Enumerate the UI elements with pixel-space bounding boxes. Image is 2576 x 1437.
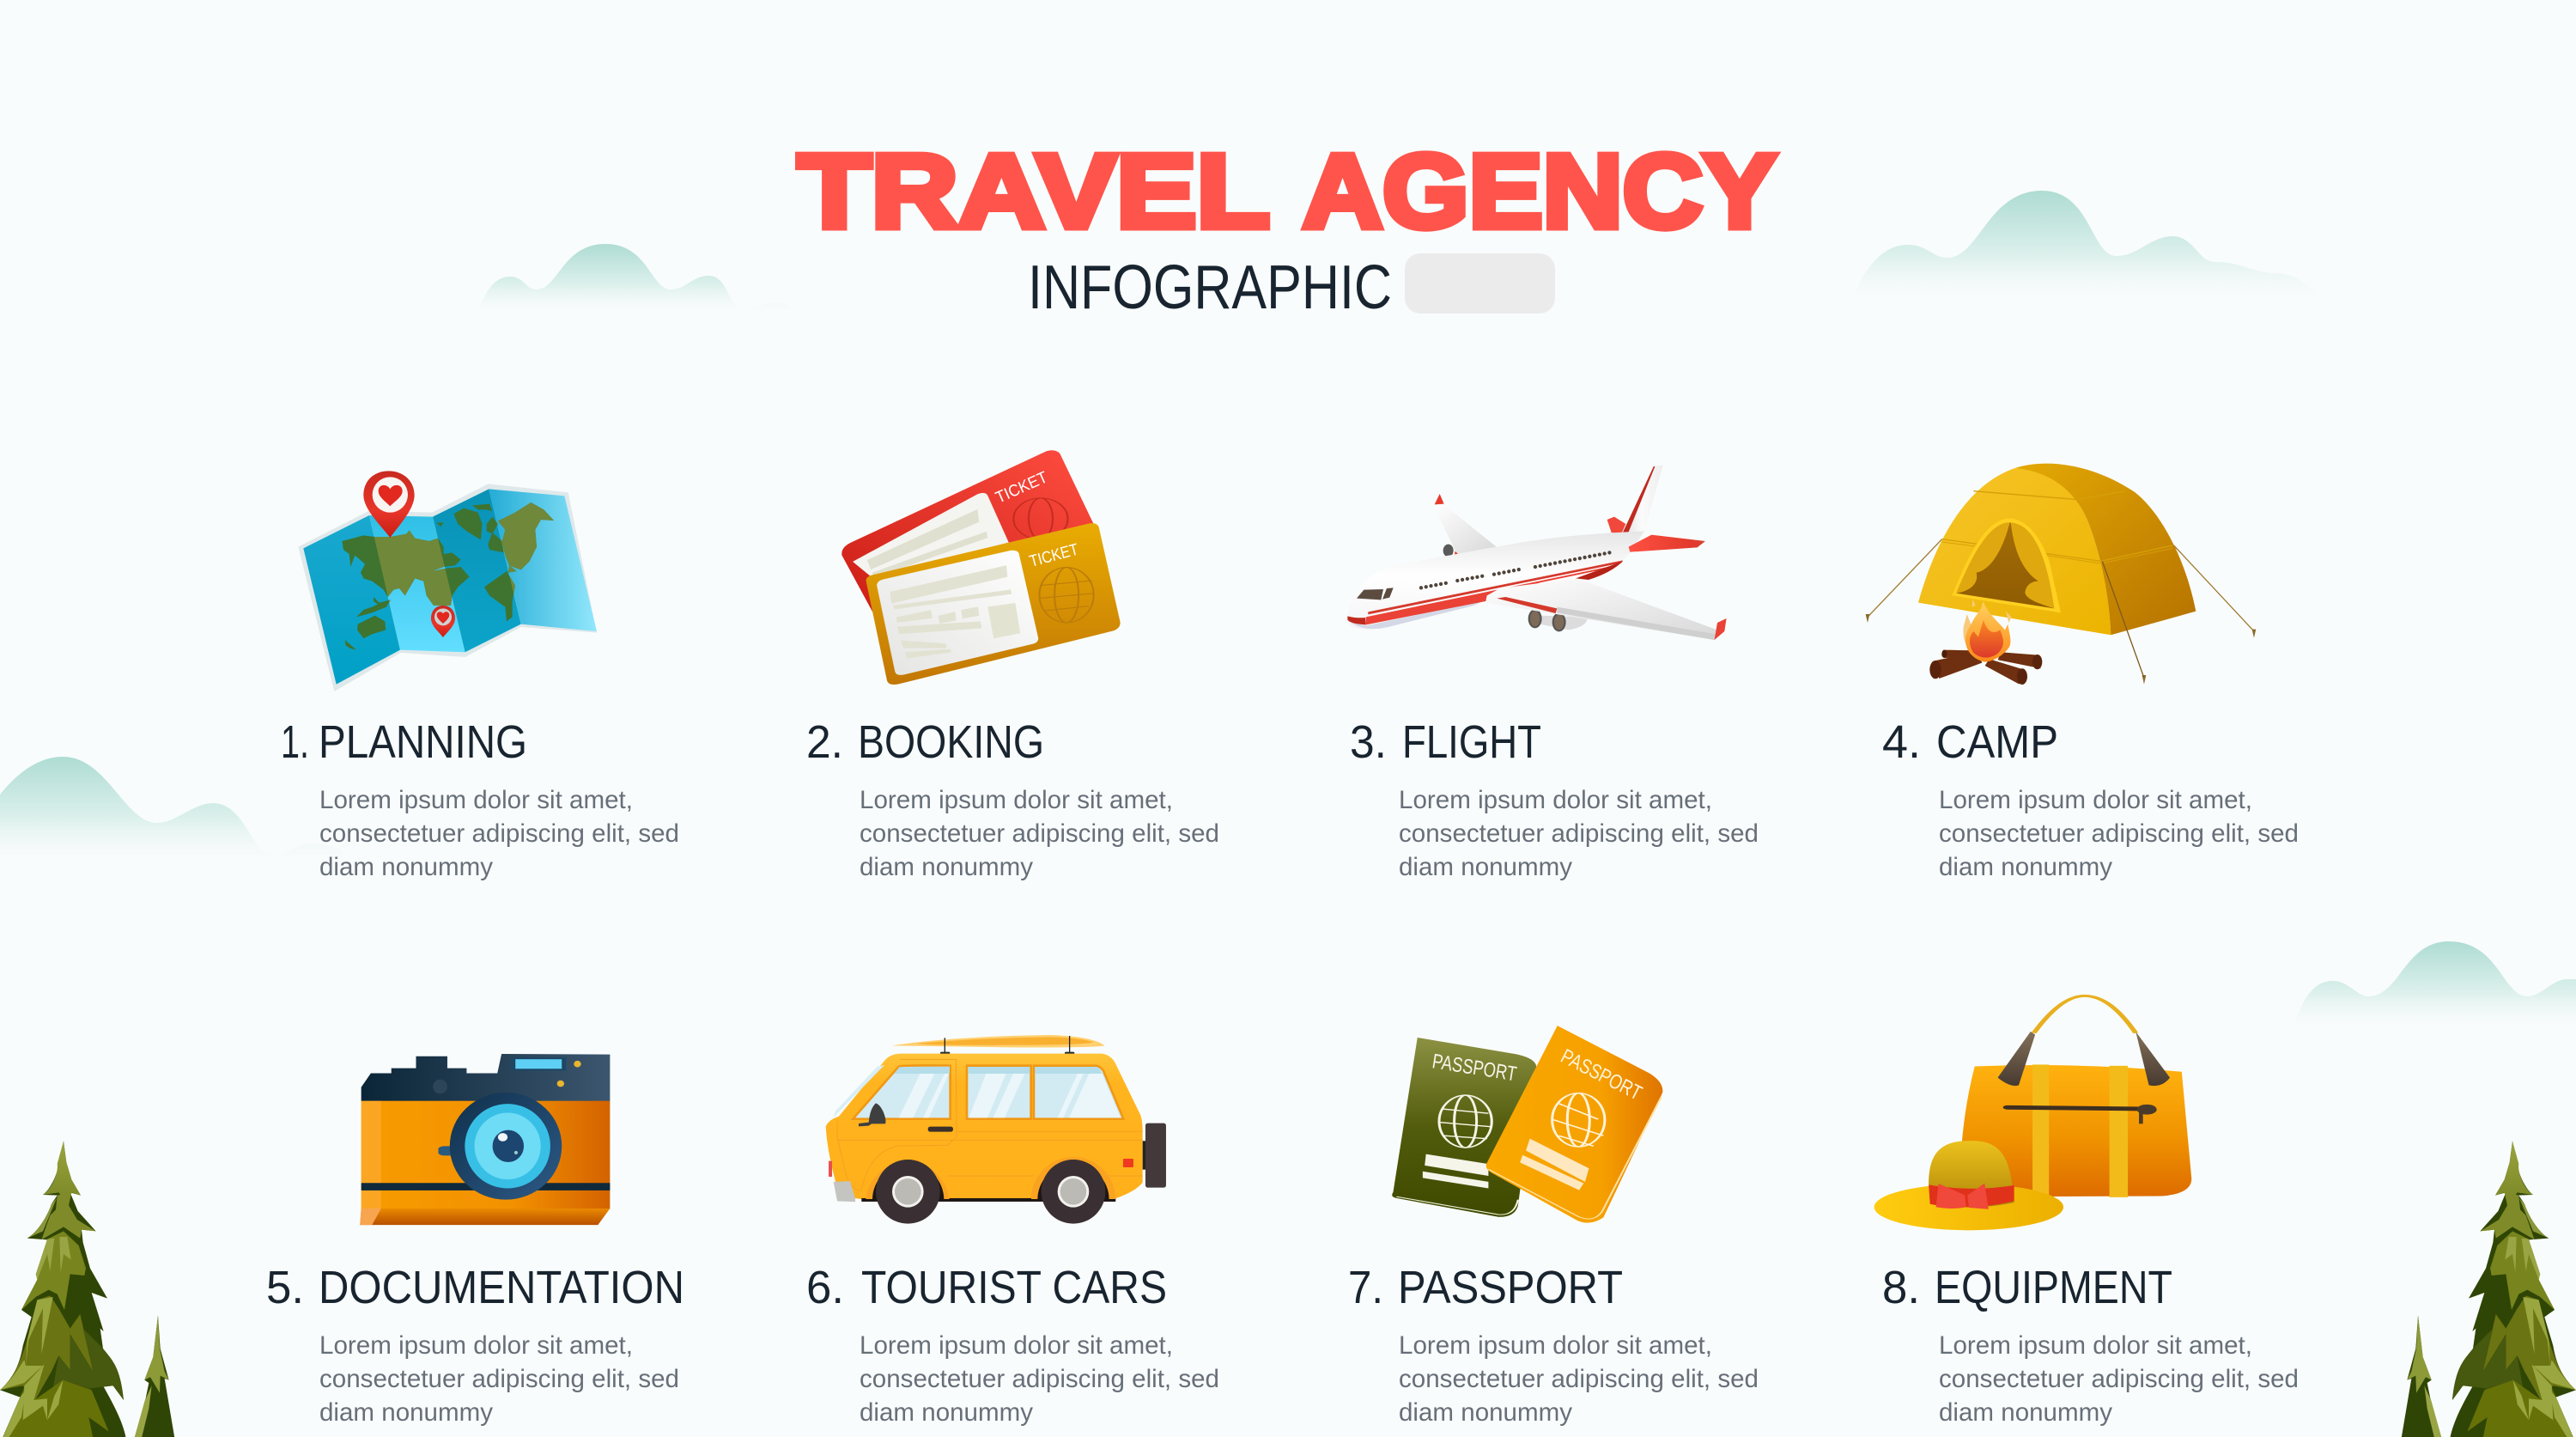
- title: TRAVEL: [798, 132, 1270, 249]
- icon: airplane: [1347, 466, 1727, 640]
- heading: 3. FLIGHT: 3.: [1350, 716, 1387, 768]
- text block: consectetuer adipiscing elit, sed: [319, 1365, 679, 1393]
- panel: flight: [1347, 466, 1759, 881]
- cloud: right: [2290, 941, 2576, 1033]
- trees: bottom left: [0, 1141, 174, 1437]
- text block: [1939, 1331, 2299, 1427]
- heading: 4. CAMP: [1882, 716, 2058, 768]
- text block: [860, 1331, 1219, 1427]
- heading: 8. EQUIPMENT: 8.: [1882, 1262, 1920, 1313]
- heading: 7. PASSPORT: 7.: [1348, 1262, 1383, 1313]
- text block: consectetuer adipiscing elit, sed: [1939, 1365, 2299, 1393]
- heading: 2. BOOKING: [806, 716, 1044, 768]
- text block: Lorem ipsum dolor sit amet,: [319, 786, 633, 814]
- text block: consectetuer adipiscing elit, sed: [1399, 1365, 1759, 1393]
- heading: 3. FLIGHT: [1350, 716, 1541, 768]
- icon: folded world map with pins: [298, 471, 597, 691]
- text block: consectetuer adipiscing elit, sed: [860, 819, 1219, 848]
- text block: [319, 786, 679, 881]
- text block: consectetuer adipiscing elit, sed: [319, 819, 679, 848]
- heading: 4. CAMP: CAMP: [1936, 716, 2058, 768]
- text block: Lorem ipsum dolor sit amet,: [860, 786, 1173, 814]
- text block: diam nonummy: [319, 853, 493, 881]
- heading: 3. FLIGHT: FLIGHT: [1402, 716, 1541, 768]
- heading: 6. TOURIST CARS: TOURIST CARS: [861, 1262, 1167, 1313]
- panel: camp: [1866, 464, 2299, 881]
- text block: consectetuer adipiscing elit, sed: [860, 1365, 1219, 1393]
- subtitle: INFOGRAPHIC: [1028, 253, 1392, 322]
- heading: 4. CAMP: 4.: [1882, 716, 1921, 768]
- panel: tourist cars: [806, 1035, 1219, 1427]
- icon: tent and campfire: [1866, 464, 2256, 685]
- text block: diam nonummy: [860, 853, 1033, 881]
- text block: Lorem ipsum dolor sit amet,: [1939, 1331, 2252, 1360]
- redacted grey patch: [1405, 253, 1555, 314]
- icon: camera: [360, 1054, 610, 1225]
- panel: equipment: [1874, 996, 2299, 1427]
- icon: two passports: PASSPORT: [1557, 1044, 1646, 1105]
- cloud: top right: [1848, 191, 2329, 307]
- cloud: left: [0, 757, 343, 869]
- text block: Lorem ipsum dolor sit amet,: [860, 1331, 1173, 1360]
- icon: two passports: PASSPORT: [1431, 1050, 1518, 1086]
- trees: bottom right: [2402, 1141, 2576, 1437]
- heading: 8. EQUIPMENT: EQUIPMENT: [1935, 1262, 2172, 1313]
- icon: two tickets: [841, 450, 1121, 685]
- text block: consectetuer adipiscing elit, sed: [1399, 819, 1759, 848]
- cloud: top left: [475, 244, 801, 318]
- icon: yellow van with surfboard: [826, 1035, 1166, 1224]
- text block: diam nonummy: [1399, 1398, 1572, 1427]
- text block: [319, 1331, 679, 1427]
- panel: booking: [806, 450, 1219, 881]
- text block: Lorem ipsum dolor sit amet,: [1399, 1331, 1712, 1360]
- panel: documentation: [266, 1054, 684, 1427]
- text block: diam nonummy: [1939, 853, 2112, 881]
- heading: 1. PLANNING: 1.: [281, 716, 309, 768]
- heading: 6. TOURIST CARS: 6.: [806, 1262, 844, 1313]
- panel: planning: [281, 471, 679, 881]
- icon: two tickets: TICKET: [993, 468, 1051, 508]
- icon: bag and sun hat: [1874, 996, 2191, 1230]
- text block: consectetuer adipiscing elit, sed: [1939, 819, 2299, 848]
- panel: passport: [1348, 1026, 1759, 1427]
- text block: Lorem ipsum dolor sit amet,: [1399, 786, 1712, 814]
- heading: 1. PLANNING: PLANNING: [319, 716, 527, 768]
- heading: 5. DOCUMENTATION: 5.: [266, 1262, 304, 1313]
- title: AGENCY: [1303, 132, 1777, 249]
- heading: 7. PASSPORT: PASSPORT: [1398, 1262, 1623, 1313]
- text block: diam nonummy: [1939, 1398, 2112, 1427]
- text block: [1399, 786, 1759, 881]
- text block: [1939, 786, 2299, 881]
- text block: [1399, 1331, 1759, 1427]
- text block: diam nonummy: [1399, 853, 1572, 881]
- text block: [860, 786, 1219, 881]
- text block: diam nonummy: [860, 1398, 1033, 1427]
- text block: Lorem ipsum dolor sit amet,: [319, 1331, 633, 1360]
- title: [798, 132, 1777, 249]
- text block: diam nonummy: [319, 1398, 493, 1427]
- text block: Lorem ipsum dolor sit amet,: [1939, 786, 2252, 814]
- heading: 2. BOOKING: 2.: [806, 716, 843, 768]
- icon: two passports: [1392, 1026, 1662, 1223]
- icon: two tickets: TICKET: [1028, 540, 1081, 571]
- heading: 5. DOCUMENTATION: DOCUMENTATION: [319, 1262, 684, 1313]
- heading: 2. BOOKING: BOOKING: [858, 716, 1044, 768]
